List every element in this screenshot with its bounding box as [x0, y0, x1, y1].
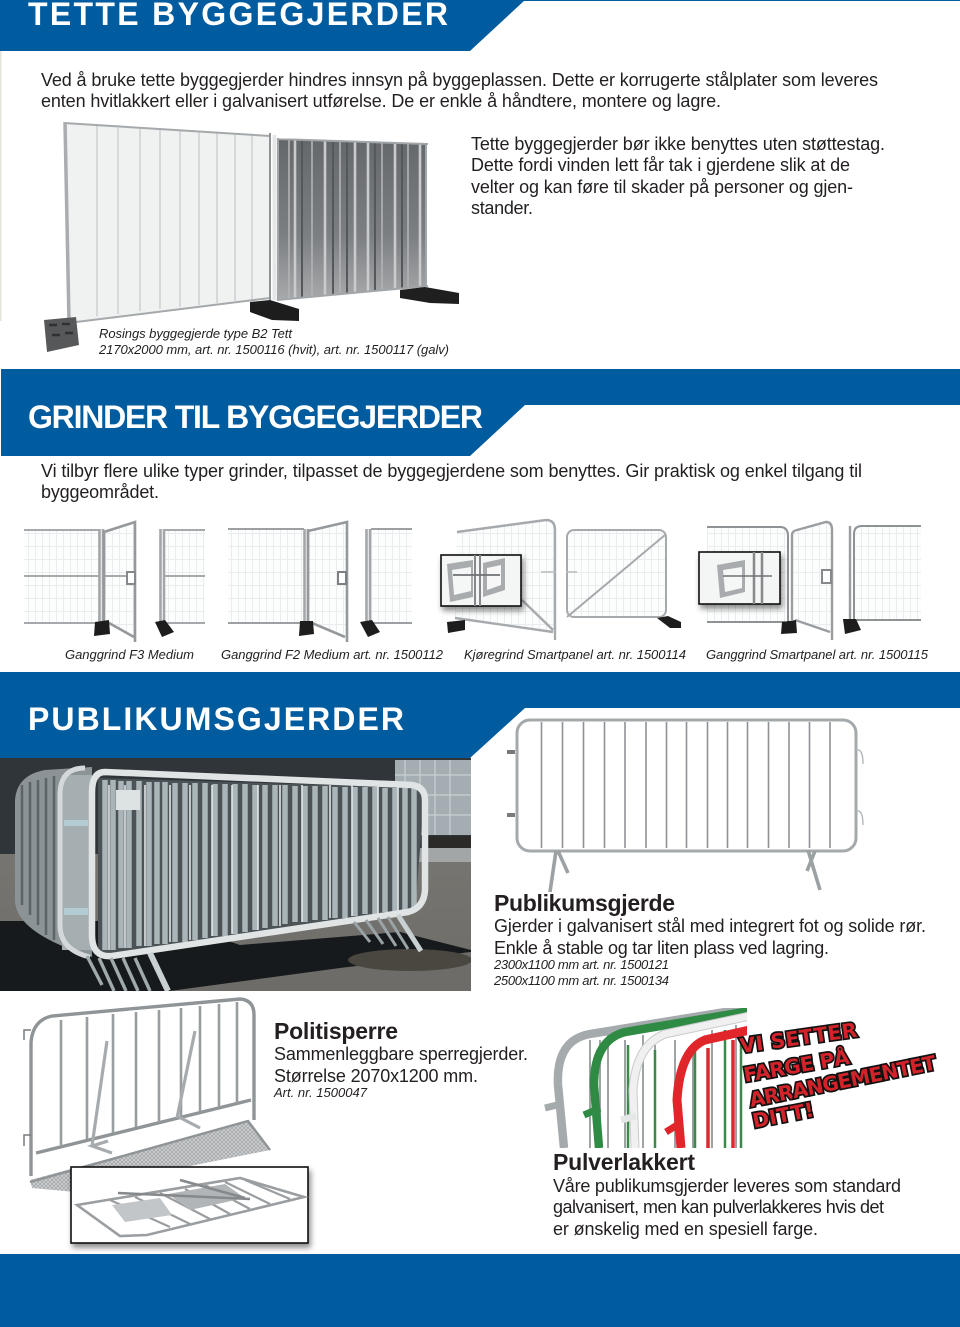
fence caption: Rosings byggegjerde type B2 Tett — [99, 326, 293, 341]
photo: solid fence panels — [44, 122, 459, 352]
publikumsgjerde text: Gjerder i galvanisert stål med integrert fot og solide rør. — [494, 916, 926, 936]
warning text: stander. — [471, 198, 533, 218]
gate captions: Ganggrind F3 Medium — [65, 647, 194, 662]
pulverlakkert text — [553, 1149, 901, 1239]
photo: gate F3 medium — [24, 522, 205, 642]
inset: latch detail — [699, 552, 780, 604]
gate captions: Kjøregrind Smartpanel art. nr. 1500114 — [464, 647, 686, 662]
photo: stacked crowd barriers — [0, 758, 472, 991]
gates intro text: Vi tilbyr flere ulike typer grinder, tilpasset de byggegjerdene som benyttes. Gir praktisk og enkel tilgang til — [41, 461, 862, 481]
warning text: Dette fordi vinden lett får tak i gjerdene slik at de — [471, 155, 850, 175]
intro text: enten hvitlakkert eller i galvanisert utførelse. De er enkle å håndtere, montere og lagre. — [41, 91, 721, 111]
warning text — [471, 134, 885, 218]
photo: gate smartpanel — [699, 522, 921, 640]
publikumsgjerde text — [493, 890, 926, 988]
intro text — [41, 70, 878, 111]
section header: grinder — [1, 369, 960, 456]
gates intro text — [41, 461, 862, 502]
gate captions: Ganggrind F2 Medium art. nr. 1500112 — [221, 647, 444, 662]
publikumsgjerde text: 2500x1100 mm art. nr. 1500134 — [493, 973, 669, 988]
callout: colour slogan — [738, 1018, 939, 1133]
pulverlakkert text: galvanisert, men kan pulverlakkeres hvis det — [553, 1197, 884, 1217]
callout: colour slogan: FARGE PÅ — [742, 1045, 852, 1087]
fence caption: 2170x2000 mm, art. nr. 1500116 (hvit), art. nr. 1500117 (galv) — [98, 342, 449, 357]
inset: folded barrier — [71, 1167, 308, 1243]
callout: colour slogan: DITT! — [750, 1098, 816, 1133]
politisperre text: Sammenleggbare sperregjerder. — [274, 1044, 528, 1064]
gates intro text: byggeområdet. — [41, 482, 159, 502]
politisperre text: Art. nr. 1500047 — [273, 1085, 368, 1100]
gate captions: Ganggrind Smartpanel art. nr. 1500115 — [706, 647, 929, 662]
fence caption — [98, 326, 449, 357]
pulverlakkert text: er ønskelig med en spesiell farge. — [553, 1219, 818, 1239]
politisperre text — [273, 1018, 528, 1100]
photo: folding police barrier — [24, 999, 308, 1243]
warning text: Tette byggegjerder bør ikke benyttes uten støttestag. — [471, 134, 885, 154]
photo: crowd barrier — [507, 720, 863, 892]
gate captions — [65, 647, 929, 662]
intro text: Ved å bruke tette byggegjerder hindres innsyn på byggeplassen. Dette er korrugerte stålplater som leveres — [41, 70, 878, 90]
politisperre text: Størrelse 2070x1200 mm. — [274, 1066, 478, 1086]
inset: latch detail — [441, 555, 521, 606]
publikumsgjerde text: Enkle å stable og tar liten plass ved lagring. — [494, 938, 829, 958]
section header: grinder: GRINDER TIL BYGGEGJERDER — [28, 399, 483, 435]
section header: publikumsgjerder: PUBLIKUMSGJERDER — [28, 701, 404, 737]
pulverlakkert text: Våre publikumsgjerder leveres som standard — [553, 1176, 901, 1196]
publikumsgjerde text: Publikumsgjerde — [494, 890, 675, 916]
footer band — [0, 1254, 960, 1327]
callout: colour slogan: VI SETTER — [738, 1018, 859, 1058]
photo: powder coated barriers — [545, 1008, 750, 1148]
callout: colour slogan: ARRANGEMENTET — [747, 1050, 939, 1112]
photo: vehicle gate smartpanel — [441, 520, 681, 640]
section header: tette byggegjerder — [0, 0, 960, 321]
section header: publikumsgjerder — [0, 672, 960, 758]
publikumsgjerde text: 2300x1100 mm art. nr. 1500121 — [493, 957, 669, 972]
photo: gate F2 medium — [228, 522, 412, 642]
warning text: velter og kan føre til skader på personer og gjen- — [471, 177, 853, 197]
politisperre text: Politisperre — [274, 1018, 398, 1044]
pulverlakkert text: Pulverlakkert — [553, 1149, 695, 1175]
